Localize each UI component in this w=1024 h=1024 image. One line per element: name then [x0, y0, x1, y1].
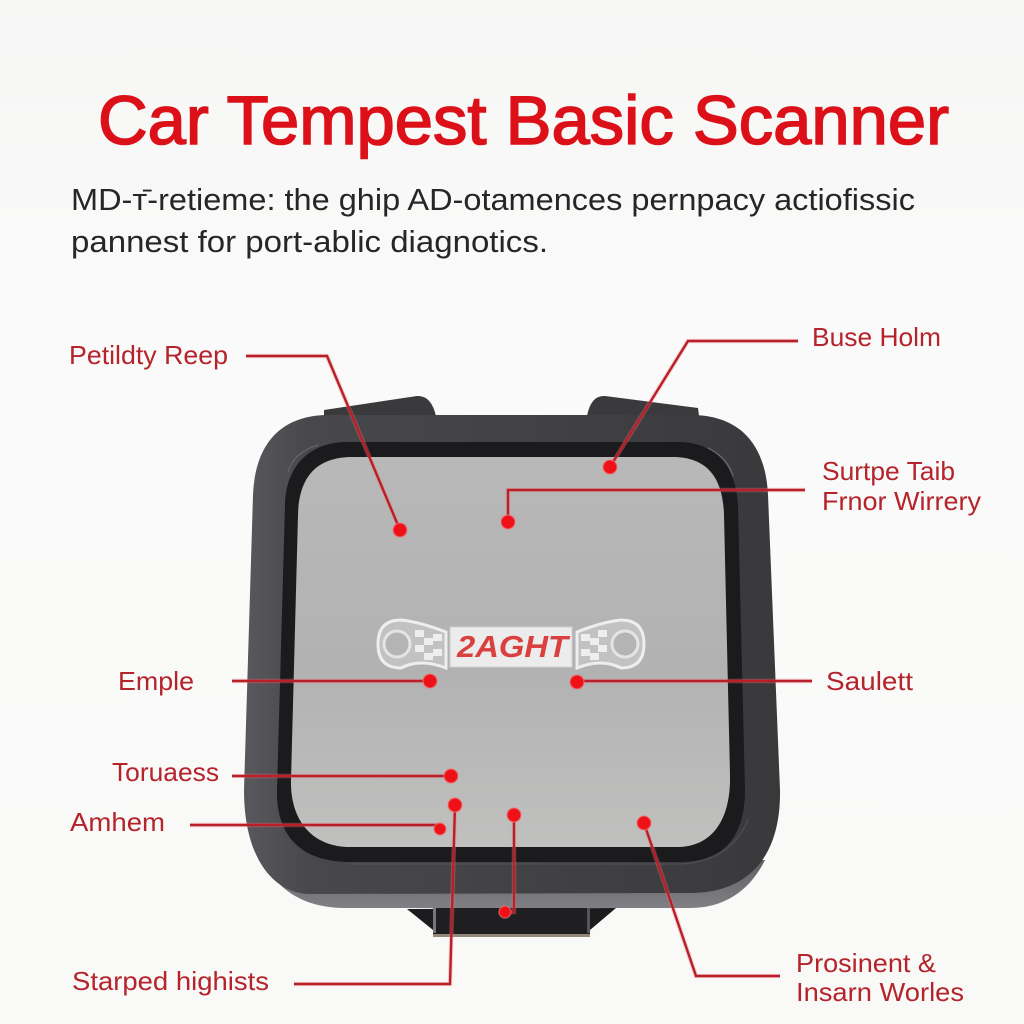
subtitle: MD-т̄-retieme: the ghip AD-otamences pernpacy actiofissic — [71, 182, 915, 217]
callout lines — [190, 341, 812, 984]
subtitle: pannest for port-ablic diagnotics. — [71, 224, 548, 259]
label: Prosinent & Insarn Worles: Prosinent & — [796, 948, 936, 978]
screen — [291, 457, 730, 847]
label: Amhem: Amhem — [70, 807, 165, 837]
callout: Surtpe Taib line — [508, 490, 805, 522]
label: Buse Holm: Buse Holm — [812, 322, 941, 352]
logo plate — [450, 627, 572, 667]
callout: Petildty Reep line — [246, 356, 400, 530]
callout: Amhem line — [190, 824, 440, 826]
label: Surtpe Taib Frnor Wirrery — [822, 456, 981, 516]
callout: Emple line — [232, 680, 430, 682]
label: Surtpe Taib Frnor Wirrery: Frnor Wirrery — [822, 486, 981, 516]
label: Saulett: Saulett — [826, 666, 914, 696]
label: Emple: Emple — [118, 666, 194, 696]
label: Petildty Reep: Petildty Reep — [69, 340, 228, 370]
body: bezel highlights — [288, 445, 748, 864]
label: Prosinent & Insarn Worles: Insarn Worles — [796, 977, 964, 1007]
callout: Buse Holm line — [610, 341, 798, 467]
logo: racing flags badge — [378, 620, 644, 668]
callout labels — [69, 322, 981, 1007]
icon: left checkered flag — [378, 620, 446, 668]
callout: Prosinent line — [644, 823, 780, 976]
device: scanner — [244, 396, 780, 937]
callout: Toruaess line — [232, 775, 451, 777]
tab: top right clip — [587, 396, 699, 416]
bezel — [277, 442, 745, 862]
label: Toruaess: Toruaess — [112, 757, 219, 787]
label: Prosinent & Insarn Worles — [796, 948, 964, 1007]
subtitle — [71, 182, 915, 259]
callout: centre connector line — [505, 815, 514, 912]
icon: right checkered flag — [577, 620, 644, 668]
label: Surtpe Taib Frnor Wirrery: Surtpe Taib — [822, 456, 955, 486]
callout: Saulett line — [577, 680, 812, 682]
body: lower side — [262, 860, 765, 908]
title: Car Tempest Basic Scanner — [98, 82, 949, 159]
tab: top left clip — [324, 396, 436, 416]
callout dots — [393, 460, 651, 918]
label: Starped highists: Starped highists — [72, 966, 269, 996]
connector: bottom port — [407, 900, 616, 937]
logo text: 2AGHT — [456, 629, 571, 664]
callout: Starped highists line — [294, 805, 455, 984]
body: outer frame — [244, 415, 780, 894]
